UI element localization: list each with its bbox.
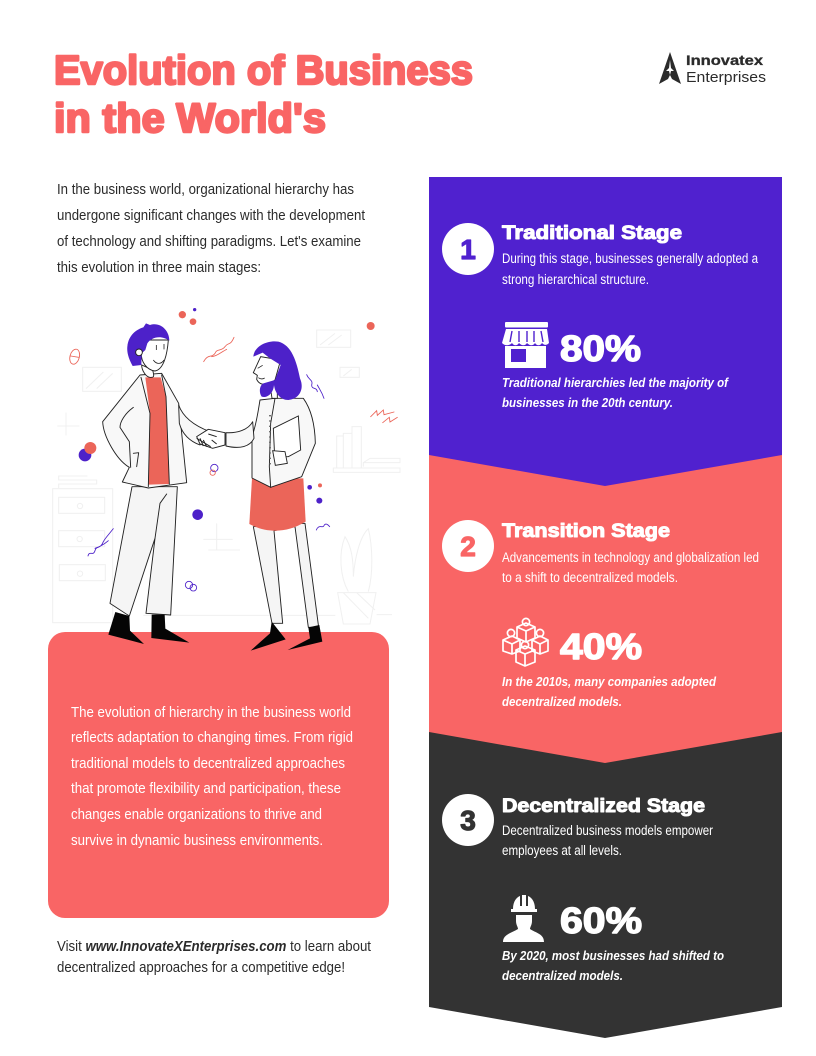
logo: Innovatex Enterprises: Enterprises xyxy=(686,69,766,86)
illustration: two business people shaking hands xyxy=(53,308,400,651)
panel: transition stage: decentralized models. xyxy=(502,694,622,709)
panel: traditional stage: 80% xyxy=(560,328,641,369)
panel: conclusion: survive in dynamic business environments. xyxy=(71,833,323,849)
panel: conclusion: changes enable organizations to thrive and xyxy=(71,807,322,823)
panel: decentralized stage xyxy=(429,732,782,1038)
icon: worker with hard hat xyxy=(503,895,544,942)
panel: transition stage: 40% xyxy=(560,626,642,667)
panel: traditional stage: During this stage, businesses generally adopted a xyxy=(502,251,758,266)
woman xyxy=(226,341,322,651)
intro text: In the business world, organizational hierarchy has xyxy=(57,182,354,198)
panel: traditional stage: Traditional Stage xyxy=(502,223,682,244)
confetti dots and squiggles xyxy=(68,308,397,591)
intro text: undergone significant changes with the development xyxy=(57,208,365,224)
panel: transition stage xyxy=(429,455,782,763)
man xyxy=(103,323,210,644)
panel: transition stage: Transition Stage xyxy=(502,521,670,542)
number badge 1: 1 xyxy=(460,234,476,265)
panel: decentralized stage: Decentralized Stage xyxy=(502,796,705,817)
panel: conclusion: that promote flexibility and participation, these xyxy=(71,781,341,797)
logo: Innovatex Enterprises: Innovatex xyxy=(686,52,763,68)
panel: traditional stage xyxy=(429,177,782,486)
panel: transition stage: In the 2010s, many companies adopted xyxy=(502,674,717,689)
number badge 3 xyxy=(442,794,494,846)
call to action xyxy=(57,939,371,976)
call to action: Visit www.InnovateXEnterprises.com to learn about xyxy=(57,939,371,955)
intro text xyxy=(57,182,365,276)
title: Evolution of Business xyxy=(54,47,473,93)
title xyxy=(54,47,473,141)
title: in the World's xyxy=(54,95,326,141)
panel: decentralized stage: employees at all levels. xyxy=(502,843,622,858)
handshake xyxy=(197,429,225,448)
icon: storefront xyxy=(502,322,549,368)
panel: traditional stage: strong hierarchical structure. xyxy=(502,272,649,287)
number badge 3: 3 xyxy=(460,805,476,836)
icon: connected blocks xyxy=(503,618,548,666)
number badge 1 xyxy=(442,223,494,275)
panel: traditional stage: Traditional hierarchies led the majority of xyxy=(502,375,729,390)
panel: conclusion: traditional models to decentralized approaches xyxy=(71,756,345,772)
call to action: decentralized approaches for a competitive edge! xyxy=(57,960,345,976)
background office line art xyxy=(53,330,400,624)
intro text: of technology and shifting paradigms. Let's examine xyxy=(57,234,361,250)
panel: transition stage: to a shift to decentralized models. xyxy=(502,570,678,585)
panel: decentralized stage: By 2020, most businesses had shifted to xyxy=(502,948,724,963)
panel: conclusion: The evolution of hierarchy in the business world xyxy=(71,705,351,721)
panel: decentralized stage: Decentralized business models empower xyxy=(502,823,713,838)
panel: decentralized stage: 60% xyxy=(560,900,642,941)
panel: decentralized stage: decentralized models. xyxy=(502,968,623,983)
panel: transition stage: Advancements in technology and globalization led xyxy=(502,550,759,565)
intro text: this evolution in three main stages: xyxy=(57,260,261,276)
logo: Innovatex Enterprises xyxy=(659,52,766,86)
panel: traditional stage: businesses in the 20th century. xyxy=(502,395,673,410)
panel: conclusion xyxy=(48,632,389,918)
panel: conclusion: reflects adaptation to changing times. From rigid xyxy=(71,730,353,746)
number badge 2 xyxy=(442,520,494,572)
number badge 2: 2 xyxy=(460,531,476,562)
